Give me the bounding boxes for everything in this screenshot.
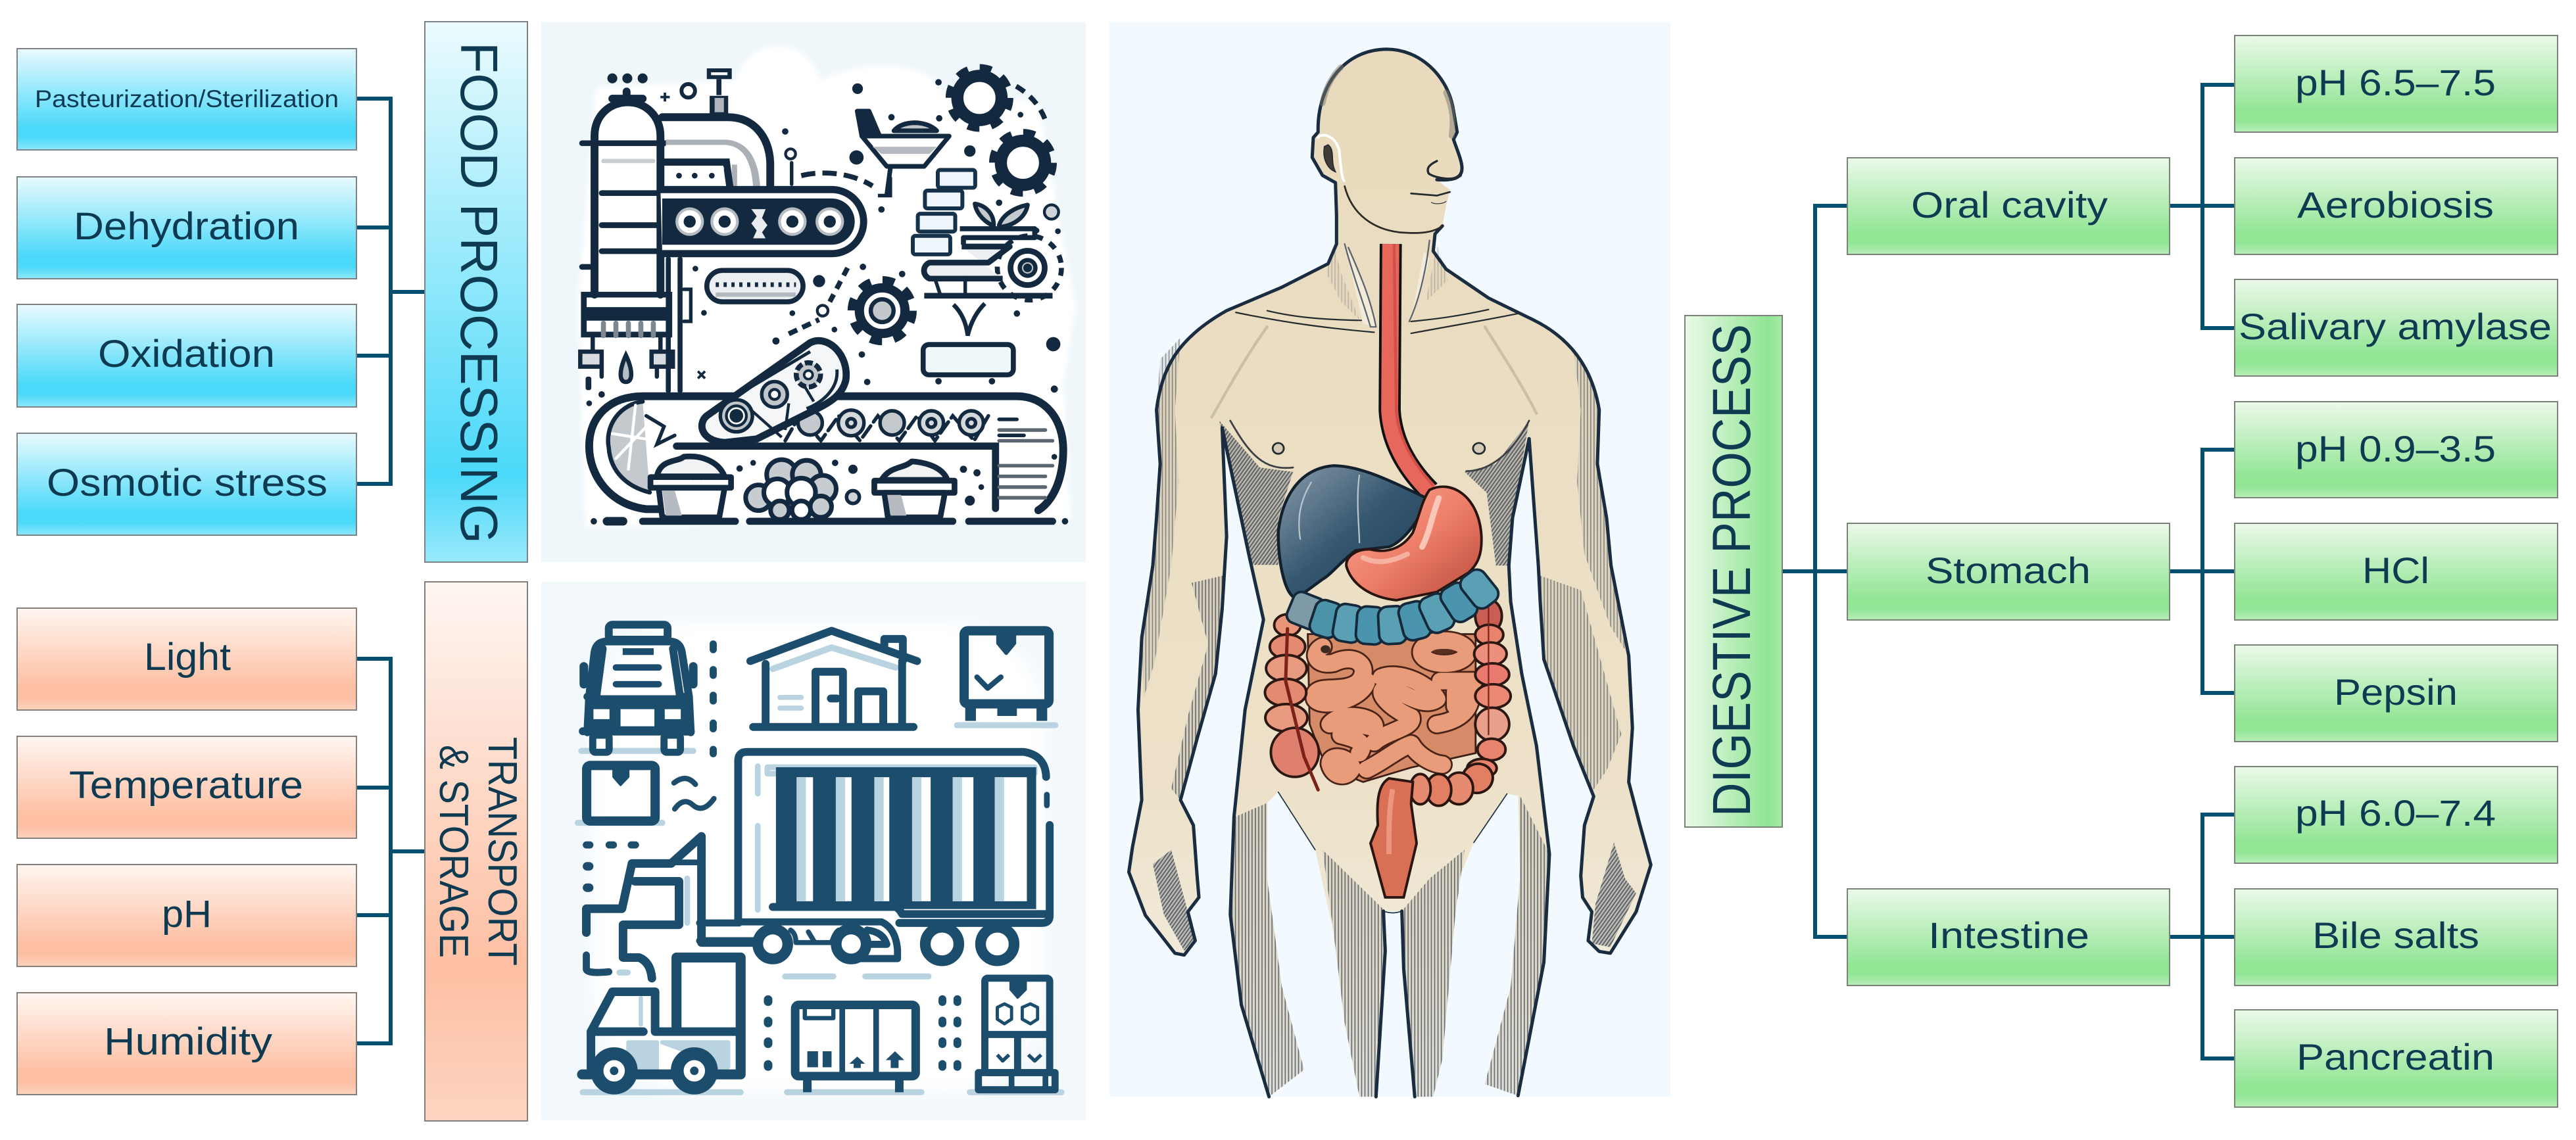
body shading: hatching on limbs and torso (1142, 244, 1636, 1097)
connector: digestive trunk (1782, 206, 1847, 937)
box: Osmotic stress (17, 433, 356, 535)
box: pH 6.5–7.5: pH 6.5–7.5 (2295, 62, 2496, 103)
box: Intestine: Intestine (1928, 914, 2089, 956)
heading: TRANSPORT & STORAGE (425, 582, 527, 1121)
connector: stomach branches (2170, 450, 2235, 693)
box: Pepsin (2235, 645, 2558, 742)
box: Pancreatin (2235, 1010, 2558, 1107)
icon: box truck (582, 957, 741, 1088)
organ: transverse colon (1284, 566, 1502, 645)
panel: digestive process tree (1685, 36, 2558, 1107)
icon: parcel with check (964, 630, 1049, 721)
icon: plant on gear assembly (924, 204, 1052, 296)
box: Stomach: Stomach (1926, 550, 2091, 591)
box: Aerobiosis: Aerobiosis (2297, 184, 2494, 226)
box: Humidity (17, 993, 356, 1095)
heading: FOOD PROCESSING: FOOD PROCESSING (450, 42, 508, 544)
human body silhouette (1129, 49, 1651, 1097)
icon: dashed flow lines (789, 86, 1059, 504)
heading: FOOD PROCESSING (425, 22, 527, 562)
icon: route dots (583, 640, 961, 1071)
illustration: transport and storage (541, 582, 1086, 1120)
connector: food processing tree (356, 99, 425, 484)
icon: truck front view (583, 625, 693, 752)
icon: light ground shadows (578, 725, 1061, 1092)
icon: gears (852, 68, 1061, 341)
body outline (1129, 49, 1651, 1097)
box: Stomach (1847, 523, 2170, 620)
icon: food bucket two (874, 462, 954, 517)
organ: small intestine (1308, 634, 1476, 782)
icon: parcel left (587, 765, 714, 821)
icon: stacked cartons (979, 978, 1055, 1090)
organ: liver (1278, 465, 1426, 598)
icon: bricks (913, 170, 975, 254)
icon: pile of food (746, 460, 836, 519)
connector: intestine branches (2170, 815, 2235, 1058)
icon: check mark and empty box (923, 304, 1013, 375)
panel: food processing factors (17, 22, 527, 562)
box: pH 6.0–7.4: pH 6.0–7.4 (2295, 792, 2496, 834)
box: pH 0.9–3.5 (2235, 402, 2558, 498)
box: Oxidation (17, 304, 356, 407)
box: Dehydration (17, 177, 356, 279)
connector: transport tree (356, 659, 425, 1043)
box: Pepsin: Pepsin (2334, 671, 2458, 713)
panel: transport and storage factors (17, 582, 527, 1121)
icon: warehouse (750, 630, 917, 727)
organs: intestines (1265, 566, 1511, 897)
illustration: human digestive system (1109, 22, 1670, 1097)
box: pH 0.9–3.5: pH 0.9–3.5 (2295, 428, 2496, 469)
icon: truck cab with crane (587, 836, 753, 978)
organ: ascending colon (1265, 614, 1319, 790)
icon: lower conveyor belt (589, 396, 1063, 510)
box: Aerobiosis (2235, 158, 2558, 254)
icon: valve and small marks (585, 68, 1061, 460)
organ: stomach (1346, 487, 1482, 600)
box: Dehydration: Dehydration (74, 205, 299, 248)
box: Temperature (17, 736, 356, 838)
box: pH (17, 865, 356, 966)
icon: top pipe and upper conveyor (660, 117, 863, 254)
organ: sigmoid colon and rectum (1371, 758, 1498, 897)
box: pH: pH (162, 893, 212, 936)
box: Intestine (1847, 889, 2170, 986)
organ: esophagus (1390, 244, 1433, 491)
icon: hopper funnel (857, 111, 949, 195)
box: HCl: HCl (2362, 550, 2429, 591)
connector: oral cavity branches (2170, 85, 2235, 328)
box: Bile salts: Bile salts (2312, 914, 2479, 956)
box: Light: Light (144, 636, 231, 678)
box: Oral cavity: Oral cavity (1911, 184, 2108, 226)
illustration: food processing machinery (541, 22, 1086, 562)
organ: descending colon (1467, 600, 1511, 778)
box: Salivary amylase (2235, 279, 2558, 376)
heading: DIGESTIVE PROCESS: DIGESTIVE PROCESS (1702, 324, 1762, 817)
box: Pasteurization/Sterilization: Pasteurization/Sterilization (35, 85, 339, 112)
box: Temperature: Temperature (69, 764, 303, 807)
box: Oxidation: Oxidation (98, 333, 275, 375)
box: Humidity: Humidity (104, 1020, 272, 1063)
icon: articulated truck trailer (700, 752, 1050, 961)
icon: inclined gear belt (702, 341, 846, 442)
box: Light (17, 608, 356, 710)
face details: ear, nose, mouth, jaw (1212, 67, 1536, 471)
heading: TRANSPORT & STORAGE: TRANSPORT (479, 737, 525, 966)
heading: DIGESTIVE PROCESS (1685, 316, 1782, 827)
icon: food bucket one (650, 456, 731, 517)
icon: conveyor base line (591, 460, 1068, 525)
box: Pancreatin: Pancreatin (2297, 1036, 2494, 1078)
box: pH 6.0–7.4 (2235, 767, 2558, 863)
icon: pallet of cartons (795, 1005, 915, 1092)
icon: distillation tank (580, 91, 691, 391)
box: Pasteurization/Sterilization (17, 49, 356, 150)
icon: perforated roller (707, 270, 803, 302)
heading: TRANSPORT & STORAGE: & STORAGE (431, 745, 476, 958)
box: HCl (2235, 523, 2558, 620)
box: Oral cavity (1847, 158, 2170, 254)
box: pH 6.5–7.5 (2235, 36, 2558, 132)
box: Salivary amylase: Salivary amylase (2239, 306, 2552, 347)
box: Bile salts (2235, 889, 2558, 986)
box: Osmotic stress: Osmotic stress (47, 462, 328, 504)
